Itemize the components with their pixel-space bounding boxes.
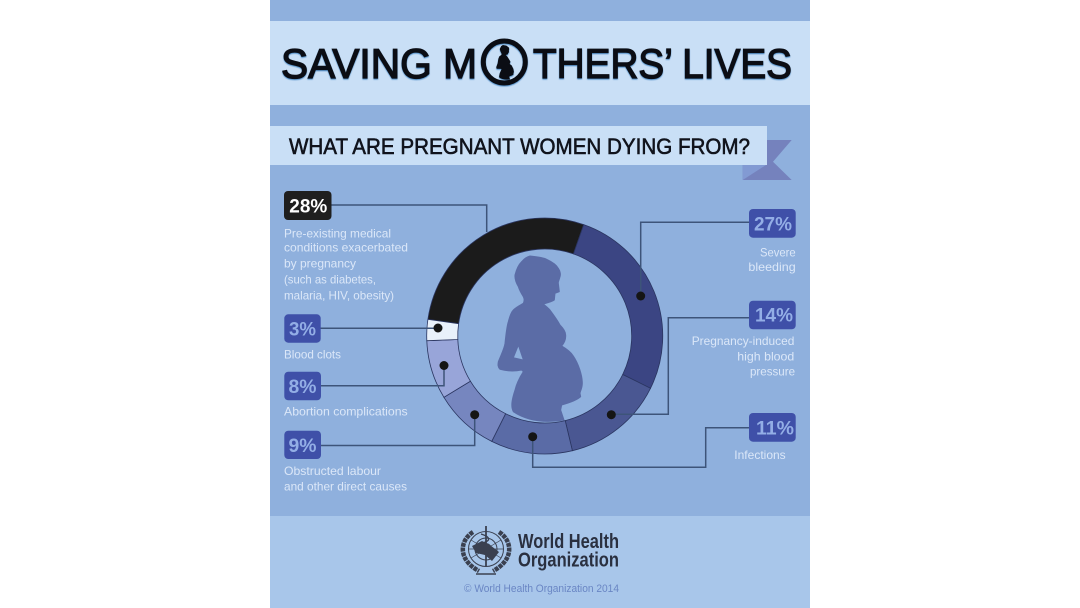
segment 9% [444,381,506,441]
title: SAVING M [281,40,477,87]
callout: 8%: Abortion complications [284,405,408,419]
organization name: World Health [518,531,619,553]
subheading banner [270,126,767,165]
segment 8% [427,340,470,397]
callout: 28%: 28% [289,196,327,217]
title: THERS’ LIVES [533,40,792,87]
callout: 27%: bleeding [748,260,796,274]
footer panel [270,516,810,608]
organization name [518,531,619,572]
segment 14% [565,374,650,451]
ribbon tail [743,140,792,180]
segment 28% [428,218,584,324]
callout: 8% [284,361,448,419]
callout: 14%: pressure [750,365,795,379]
callout: 3% [284,314,442,361]
background panel [270,0,810,608]
callout: 9%: 9% [288,436,317,457]
callout: 9%: and other direct causes [284,479,407,493]
callout: 28%: malaria, HIV, obesity) [284,288,394,302]
callout: 28% [284,191,487,302]
callout: 14%: high blood [737,350,794,364]
callout: 11% [528,413,796,467]
callout: 3%: Blood clots [284,347,341,361]
callout: 28%: (such as diabetes, [284,273,376,287]
callout: 27% [636,209,796,300]
copyright: © World Health Organization 2014 [464,583,619,595]
callout: 9%: Obstructed labour [284,464,381,478]
callout: 8%: 8% [288,377,317,398]
icon: WHO emblem [463,526,509,574]
callout: 3%: 3% [289,320,316,341]
segment 3% [427,319,459,341]
organization name: Organization [518,550,619,572]
segment 27% [573,225,663,388]
callout: 28%: conditions exacerbated [284,241,408,255]
title banner [270,21,810,105]
callout: 9% [284,410,479,493]
subheading banner: WHAT ARE PREGNANT WOMEN DYING FROM? [289,134,750,159]
callout: 14% [607,301,796,419]
donut chart [427,218,663,454]
callout: 27%: 27% [754,215,792,236]
callout: 11%: 11% [756,418,794,439]
callout: 11%: Infections [734,448,786,462]
callout: 27%: Severe [760,245,796,259]
callout: 28%: by pregnancy [284,256,356,270]
callout: 14%: 14% [755,306,793,327]
callout: 28%: Pre-existing medical [284,227,391,241]
pregnant woman silhouette [498,256,582,421]
segment 11% [492,414,572,454]
title [281,40,792,87]
callout: 14%: Pregnancy-induced [692,334,794,348]
